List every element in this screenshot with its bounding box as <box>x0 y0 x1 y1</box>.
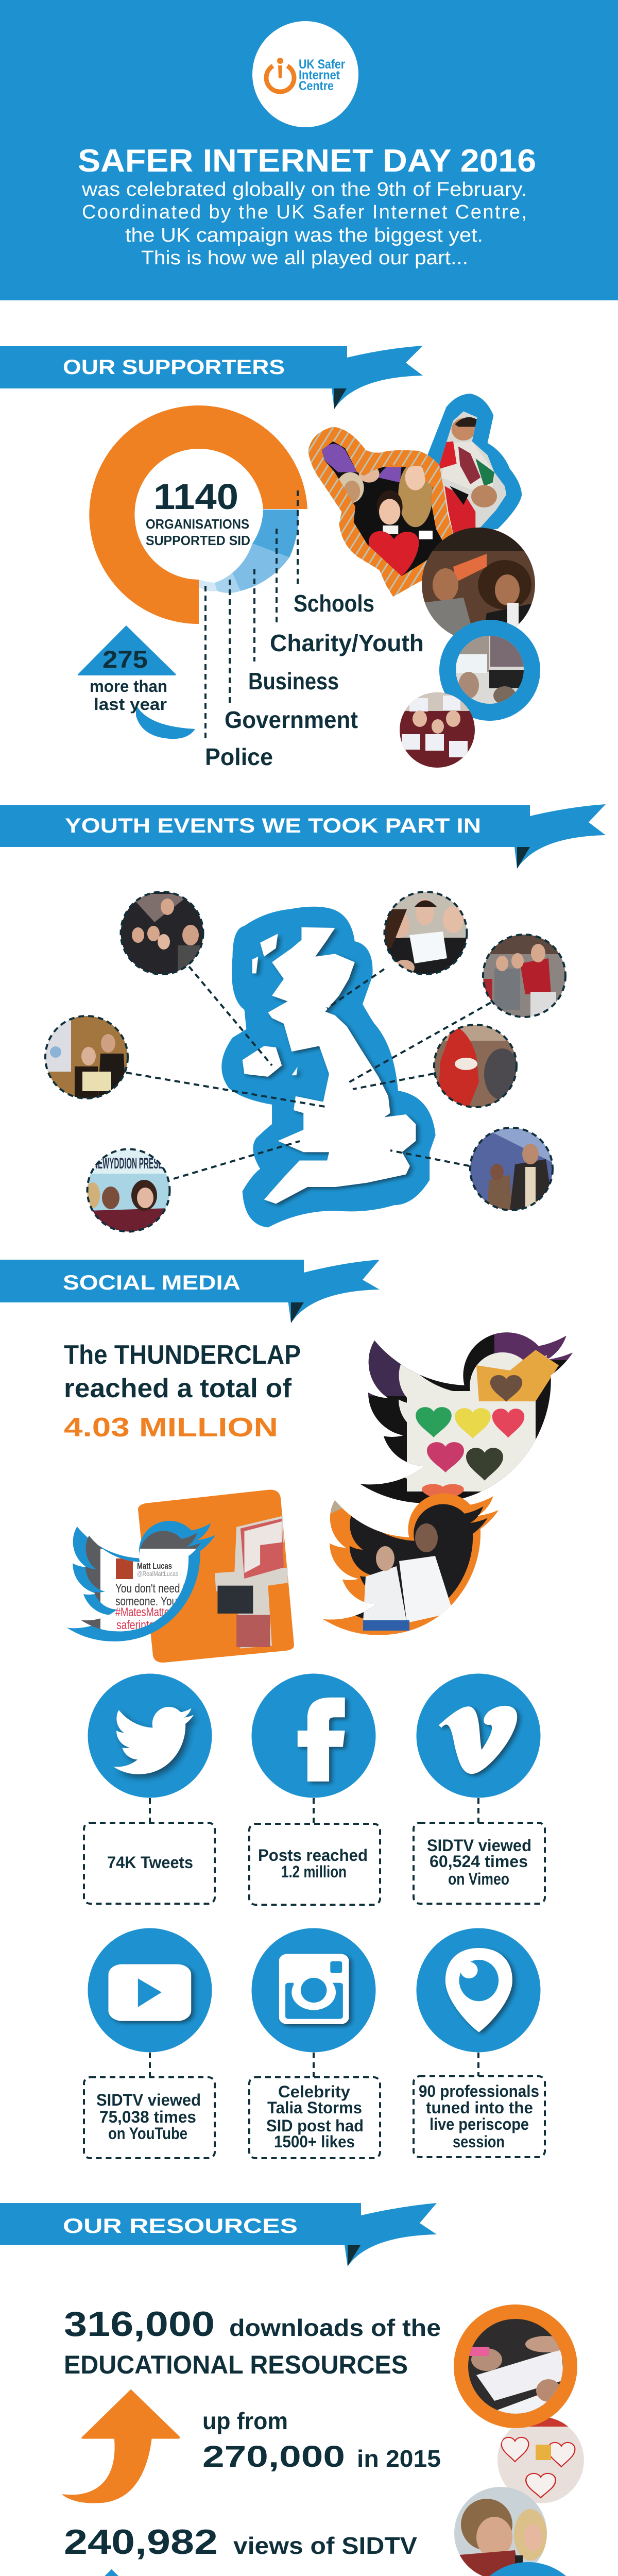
heading ribbon: our resources <box>0 2203 437 2266</box>
instagram stat: Talia Storms <box>267 2098 362 2117</box>
photo bird: Matt Lucas tweet: #MatesMatte <box>115 1605 169 1619</box>
periscope stat: 90 professionals <box>419 2082 539 2100</box>
text: NEWYDDION PRESEL <box>93 1155 167 1172</box>
social icons and stat boxes <box>84 1673 545 2158</box>
event photo: pupils with tablet <box>384 891 469 976</box>
youtube stat: SIDTV viewed <box>96 2091 201 2109</box>
header panel <box>0 0 618 300</box>
leader lines and sector labels: Government <box>225 706 358 733</box>
periscope stat: live periscope <box>430 2115 529 2133</box>
photo: resources hearts wall <box>494 2416 587 2504</box>
event photo: children in audience <box>482 934 567 1019</box>
photo bird: Matt Lucas tweet: @RealMattLucas <box>137 1570 178 1578</box>
heading ribbon: our supporters: OUR SUPPORTERS <box>63 356 285 379</box>
photo: presenters with microphone <box>453 2486 548 2576</box>
UK map <box>221 907 436 1228</box>
leader lines and sector labels: Business <box>248 668 339 694</box>
text: up from 270,000: 270,000 <box>202 2440 345 2473</box>
tilted orange facebook tile <box>138 1490 294 1663</box>
instagram stat <box>249 1928 380 2158</box>
text: thunderclap reach: The THUNDERCLAP <box>64 1340 301 1370</box>
total: 1140 organisations: SUPPORTED SID <box>146 533 250 548</box>
text: up from 270,000: in 2015 <box>357 2445 441 2472</box>
periscope stat <box>414 1928 545 2157</box>
youtube stat: on YouTube <box>108 2124 187 2143</box>
intro text: This is how we all played our part... <box>141 247 468 269</box>
photo: girls in orange hand <box>308 427 462 597</box>
photo collage: supporters <box>308 394 540 769</box>
text: downloads stat: downloads of the <box>229 2314 441 2341</box>
arrow: 275 more than last year: 275 <box>102 646 148 673</box>
vimeo stat: on Vimeo <box>448 1870 509 1888</box>
heading ribbon: our resources: OUR RESOURCES <box>63 2215 298 2238</box>
text: downloads stat: EDUCATIONAL RESOURCES <box>64 2350 408 2379</box>
vimeo stat: SIDTV viewed <box>427 1836 531 1855</box>
facebook stat <box>249 1673 380 1905</box>
logo: UK Safer Internet Centre <box>252 21 358 127</box>
event photo: pupils with teacher <box>118 890 206 978</box>
photo: pupils holding hearts <box>399 692 475 769</box>
total: 1140 organisations <box>146 477 250 548</box>
photo: footballers in blue hand <box>427 394 522 536</box>
photo bird: Matt Lucas tweet: someone. You <box>115 1595 177 1608</box>
total: 1140 organisations: 1140 <box>153 477 238 517</box>
photo bird: Matt Lucas tweet: You don't need t <box>115 1582 185 1596</box>
heading ribbon: social media <box>0 1260 380 1323</box>
heading ribbon: youth events: YOUTH EVENTS WE TOOK PART IN <box>65 815 481 837</box>
event photo: pupil on stage <box>469 1126 556 1213</box>
twitter stat <box>84 1673 215 1904</box>
instagram stat: Celebrity <box>278 2082 350 2101</box>
intro text: was celebrated globally on the 9th of February. <box>81 179 527 200</box>
arrow: blue up <box>65 2569 177 2576</box>
photo ring: hands drawing hearts <box>454 2304 577 2428</box>
facebook stat: Posts reached <box>258 1846 368 1865</box>
photo ring: video camera <box>490 2562 566 2576</box>
photo bird: Matt Lucas tweet <box>67 1521 215 1641</box>
heading ribbon: social media: SOCIAL MEDIA <box>63 1272 241 1294</box>
text: thunderclap reach: reached a total of <box>64 1374 292 1403</box>
text: thunderclap reach <box>64 1340 301 1443</box>
title: SAFER INTERNET DAY 2016 <box>78 143 536 179</box>
heading ribbon: youth events <box>0 804 606 869</box>
facebook stat: 1.2 million <box>281 1862 347 1881</box>
leader lines and sector labels: Charity/Youth <box>270 630 424 656</box>
arrow: orange up <box>62 2389 180 2503</box>
text: downloads stat <box>64 2304 441 2379</box>
text: thunderclap reach: 4.03 MILLION <box>64 1413 278 1443</box>
logo: UK Safer Internet Centre: Internet <box>299 68 340 82</box>
text: up from 270,000: up from <box>202 2408 288 2434</box>
photo: presenters making heart hands <box>422 528 535 635</box>
intro text: Coordinated by the UK Safer Internet Centre, <box>82 201 527 223</box>
event photo: pupils presenting in Wales <box>85 1148 171 1234</box>
logo: UK Safer Internet Centre: UK Safer <box>299 57 345 72</box>
logo: UK Safer Internet Centre: Centre <box>299 79 334 93</box>
total: 1140 organisations: ORGANISATIONS <box>146 516 249 532</box>
instagram stat: SID post had <box>266 2116 364 2135</box>
youtube stat <box>84 1928 215 2158</box>
text: downloads stat: 316,000 <box>64 2304 215 2344</box>
intro text <box>81 179 527 269</box>
text: SIDTV views stat: views of SIDTV <box>233 2532 417 2559</box>
photo bird: Matt Lucas tweet: saferinte <box>116 1618 154 1632</box>
photo bird: Matt Lucas tweet: Matt Lucas <box>137 1561 172 1571</box>
leader lines and sector labels <box>205 490 424 770</box>
vimeo stat: 60,524 times <box>430 1852 528 1871</box>
arrow: 275 more than last year: last year <box>94 695 167 714</box>
vimeo stat <box>414 1673 545 1904</box>
twitter stat: 74K Tweets <box>107 1853 193 1872</box>
periscope stat: tuned into the <box>426 2098 533 2117</box>
heading ribbon: our supporters <box>0 346 423 409</box>
text: SIDTV views stat: 240,982 <box>64 2522 218 2562</box>
photo bird: hearts collage <box>355 1329 577 1504</box>
text: SIDTV views stat <box>64 2522 417 2562</box>
photo bird: footballers running <box>323 1494 499 1635</box>
dashed connector lines <box>126 967 491 1179</box>
instagram stat: 1500+ likes <box>274 2132 355 2151</box>
photo ring: #sharealheart collage <box>439 620 540 721</box>
arrow: 275 more than last year <box>78 625 195 739</box>
periscope stat: session <box>453 2132 505 2151</box>
intro text: the UK campaign was the biggest yet. <box>125 225 483 246</box>
youtube stat: 75,038 times <box>99 2108 196 2126</box>
donut chart: supporters by sector <box>89 405 307 624</box>
leader lines and sector labels: Police <box>205 743 273 770</box>
leader lines and sector labels: Schools <box>294 590 374 617</box>
event photo: presentation with sign <box>45 1015 130 1100</box>
event photo: red mascot <box>433 1023 520 1110</box>
text: up from 270,000 <box>202 2408 441 2473</box>
arrow: 275 more than last year: more than <box>90 677 167 696</box>
